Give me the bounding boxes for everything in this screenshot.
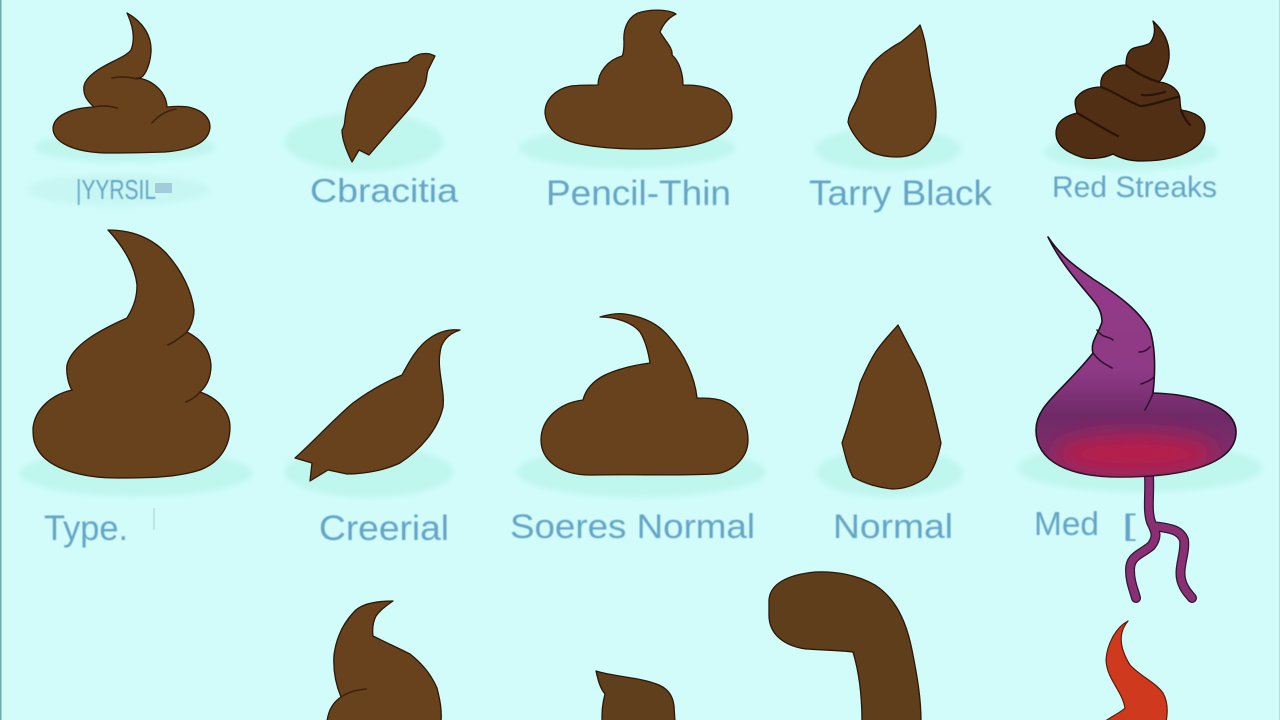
crease lines (94, 77, 176, 123)
stool shape (327, 601, 441, 720)
label: Normal (833, 508, 953, 546)
shadow (1044, 134, 1218, 170)
panel: top row item 3 (519, 10, 735, 213)
panel: middle row item 5 (1018, 237, 1262, 598)
stool shape (295, 330, 460, 481)
panel: top row item 1 (26, 13, 215, 206)
stool shape (541, 314, 748, 475)
crease lines (1077, 65, 1190, 136)
smudged label block (155, 183, 172, 193)
panel: middle row item 3 (510, 314, 765, 546)
shadow (20, 450, 252, 496)
stem and forked tails (1130, 476, 1192, 598)
panel: middle row item 4 (817, 325, 963, 546)
purple stool shape (1036, 237, 1236, 477)
shadow (817, 449, 963, 497)
red inner glow (1053, 434, 1217, 474)
red flame shape (1104, 621, 1167, 720)
panel: top row item 2 (285, 54, 459, 209)
crease lines (1093, 330, 1153, 410)
label: |YYRSIL (76, 174, 156, 205)
stool shape (769, 572, 921, 720)
stool shape (1056, 21, 1205, 161)
label: Creerial (319, 509, 449, 548)
stool shape (842, 325, 941, 489)
label fragment: [ (1122, 509, 1137, 542)
label smudge (26, 174, 210, 206)
shadow (519, 128, 735, 168)
stray label mark (153, 508, 155, 530)
panel: top row item 4 (809, 25, 993, 213)
shadow (285, 113, 443, 171)
label: Red Streaks (1052, 171, 1217, 204)
panel: top row item 5 (1044, 21, 1218, 204)
stool shape (33, 230, 230, 478)
stool shape (342, 54, 435, 162)
panel: middle row item 1 (20, 230, 252, 548)
label: Pencil-Thin (546, 174, 731, 213)
shadow (517, 447, 765, 497)
shadow (285, 447, 453, 497)
left edge line (0, 0, 2, 720)
stool shape (545, 10, 732, 149)
panel: bottom row item 2 (596, 671, 675, 720)
label: Cbracitia (310, 172, 459, 209)
shadow (35, 132, 215, 162)
shadow (1018, 444, 1262, 492)
panel: bottom row item 3 (769, 572, 921, 720)
stool shape (53, 13, 210, 153)
shadow (815, 128, 961, 170)
stool shape (596, 671, 675, 720)
crease lines (168, 332, 200, 402)
label: Med (1034, 505, 1099, 542)
label: Soeres Normal (510, 508, 755, 546)
panel: bottom row item 1 (327, 601, 441, 720)
panel: middle row item 2 (285, 330, 460, 548)
right edge line (1279, 0, 1280, 720)
crease line (341, 689, 366, 697)
stool shape (848, 25, 936, 157)
label: Type. (44, 509, 128, 548)
label: Tarry Black (809, 174, 993, 213)
panel: bottom row item 4 (1104, 621, 1167, 720)
